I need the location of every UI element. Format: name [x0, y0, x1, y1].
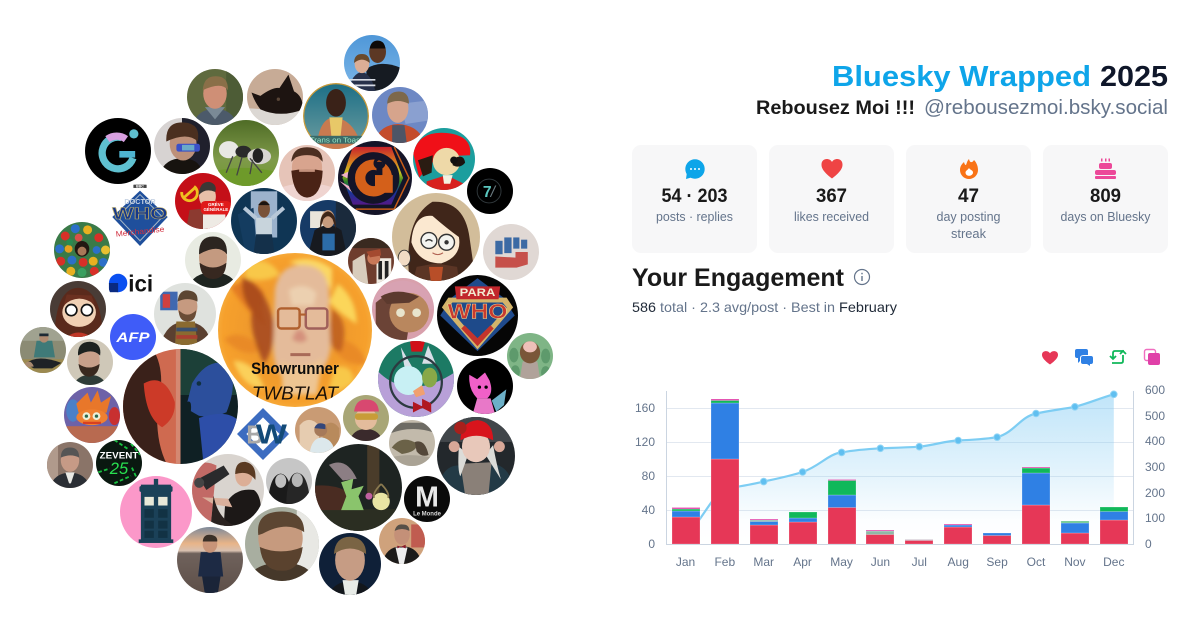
right axis labels: 100: [1145, 511, 1165, 525]
icon: heart: [822, 159, 842, 178]
month labels: Feb: [714, 555, 735, 569]
avatar: poster with gold border: [303, 83, 369, 149]
right axis labels: 300: [1145, 460, 1165, 474]
month labels: [676, 555, 1124, 569]
avatar: man in Tardis doorway: [231, 188, 297, 254]
avatar: green cartoon creature: [507, 333, 553, 379]
stacked bars: [672, 399, 1128, 544]
bar: Feb: [711, 399, 739, 544]
stat card: days on Bluesky: 809: [1090, 186, 1121, 207]
bar: Mar: [750, 519, 778, 544]
axes: [666, 391, 1134, 544]
left axis labels: 80: [642, 469, 655, 483]
avatar: Para Who logo: PARA: [460, 287, 495, 299]
month labels: Apr: [793, 555, 812, 569]
avatar: kid in pink cap: [343, 395, 389, 441]
month labels: Oct: [1027, 555, 1046, 569]
stat card: streak: streak: [951, 227, 987, 241]
avatar: man sitting in park: [20, 327, 66, 373]
avatar: Doctor Who merchandise logo: WHO: [112, 205, 168, 223]
avatar: pink cat girl on black: [457, 358, 513, 414]
stat card: streak: [906, 145, 1031, 253]
icon: quote legend: [1144, 350, 1160, 365]
stat card: posts and replies: 54 · 203: [662, 186, 728, 207]
engagement summary: February: [839, 299, 897, 315]
avatar: stained glass bird: [378, 341, 454, 417]
icon: cake: [1095, 158, 1116, 179]
avatar: BW logo: B: [246, 419, 263, 449]
avatar: man in striped scarf: [154, 283, 216, 345]
avatar: man with dark hair and beard: [67, 339, 113, 385]
avatar: man in red jacket: [372, 87, 428, 143]
avatar: black cat: [247, 69, 303, 125]
right axis labels: 400: [1145, 434, 1165, 448]
bar: Nov: [1061, 521, 1089, 544]
left axis labels: 160: [635, 401, 655, 415]
right axis labels: 600: [1145, 383, 1165, 397]
avatar: man under arches: [295, 407, 341, 453]
month labels: May: [830, 555, 853, 569]
avatar: Le Monde logo: M: [415, 481, 439, 513]
avatar: red and blue split portrait: [123, 349, 238, 464]
cumulative line: [686, 394, 1114, 533]
left axis labels: 0: [648, 537, 655, 551]
left axis labels: 40: [642, 503, 655, 517]
avatar: man with led visor: [154, 118, 210, 174]
avatar: fist logo: [483, 224, 539, 280]
icon: flame: [960, 159, 978, 179]
avatar: Zevent 25: [96, 440, 142, 486]
bar: Apr: [789, 512, 817, 544]
stat card: days on Bluesky: [1043, 145, 1168, 253]
user name and handle: [756, 97, 1168, 119]
avatar: large showrunner flame portrait: [218, 253, 372, 407]
avatar: 7 logo: /: [490, 184, 497, 201]
avatar: panda ant: [213, 120, 279, 186]
avatar: Doctor Who merchandise logo: DOCTOR: [124, 197, 156, 206]
legend icons: [1042, 349, 1160, 366]
avatar: cartoon girl with long hair: [392, 193, 480, 281]
avatar: green goblin with lantern: [315, 444, 402, 531]
avatar: poster with gold border: Trans on Toast: [310, 135, 362, 144]
bar: Dec: [1100, 507, 1128, 544]
avatar: BW logo: [237, 408, 289, 460]
user name and handle: @rebousezmoi.bsky.social: [924, 97, 1168, 119]
avatar: small illustrated character: [348, 238, 394, 284]
stat card: streak: 47: [958, 186, 979, 207]
icon: info: [854, 270, 870, 284]
title: 2025: [1100, 61, 1168, 93]
bar: Jun: [866, 530, 894, 544]
title: Bluesky Wrapped: [832, 61, 1091, 93]
right axis labels: [1145, 383, 1165, 551]
month labels: Nov: [1064, 555, 1086, 569]
avatar: two people: [344, 35, 400, 91]
user name and handle: Rebousez Moi !!!: [756, 97, 915, 119]
avatar: red hammer and sickle: GÉNÉRALE: [203, 205, 228, 212]
cumulative area: [686, 394, 1114, 544]
right axis labels: 200: [1145, 486, 1165, 500]
engagement summary: 586: [632, 299, 656, 315]
stat card: likes: [769, 145, 894, 253]
cumulative points: [760, 391, 1117, 485]
avatar: BW logo: W: [256, 418, 288, 449]
avatar: ball pit: [54, 222, 110, 278]
avatar: Le Monde logo: [404, 476, 450, 522]
avatar: ici logo: [108, 271, 153, 297]
bar: Oct: [1022, 467, 1050, 544]
avatar: 7 logo: [467, 168, 513, 214]
avatar: bearded man close-up: [245, 507, 319, 581]
avatar: man on beach at sunset: [177, 527, 243, 593]
icon: reply legend: [1075, 349, 1093, 366]
avatar: Doctor Who merchandise logo: [112, 184, 168, 246]
stat card: posts and replies: [632, 145, 757, 253]
month labels: Jan: [676, 555, 695, 569]
avatar: red hammer and sickle: GRÈVE: [208, 200, 224, 207]
avatar: large showrunner flame portrait: TWBTLAT: [252, 382, 340, 403]
month labels: Jul: [912, 555, 927, 569]
avatar: black and white women: [266, 458, 312, 504]
month labels: Jun: [871, 555, 890, 569]
stat card: likes: likes received: [794, 210, 869, 224]
avatar: C logo: [85, 118, 151, 184]
right axis labels: 0: [1145, 537, 1152, 551]
avatar: Inside Out anxiety: [64, 387, 120, 443]
avatar: Doctor Who merchandise logo: BBC: [136, 184, 145, 188]
avatar: cartoon woman with glasses: [50, 281, 106, 337]
bar: Jul: [905, 540, 933, 544]
stat card: streak: day posting: [936, 210, 1001, 224]
avatar cluster: [20, 35, 553, 595]
avatar: rainbow G hexagon: [338, 141, 412, 215]
avatar: blond man: [187, 69, 243, 125]
right axis labels: 500: [1145, 409, 1165, 423]
bar: Sep: [983, 533, 1011, 544]
avatar: Le Monde logo: Le Monde: [413, 512, 442, 518]
avatar: man in bow tie: [379, 518, 425, 564]
month labels: Sep: [986, 555, 1008, 569]
month labels: Dec: [1103, 555, 1124, 569]
avatar: Para Who logo: [437, 275, 518, 356]
avatar: blond man on navy: [319, 533, 381, 595]
avatar: cartoon pink hat: [372, 278, 434, 340]
icon: like legend: [1042, 351, 1058, 364]
engagement summary: [632, 299, 897, 315]
icon: speech bubble: [685, 159, 705, 179]
avatar: man in suit: [47, 442, 93, 488]
icon: repost legend: [1110, 351, 1126, 363]
avatar: ici logo: ici: [128, 271, 153, 297]
stat card: likes: 367: [816, 186, 847, 207]
avatar: bearded man: [185, 232, 241, 288]
chart: monthly engagement: [635, 383, 1165, 569]
heading: your engagement: Your Engagement: [632, 264, 845, 292]
avatar: man with large beard: [279, 145, 335, 201]
avatar: Zevent 25: 25: [109, 459, 129, 478]
avatar: Doctor Who merchandise logo: Merchandise: [115, 225, 165, 239]
avatar: Para Who logo: WHO: [448, 301, 507, 324]
avatar: Zevent 25: ZEVENT: [100, 450, 139, 460]
left axis labels: 120: [635, 435, 655, 449]
avatar: AFP logo: AFP: [115, 330, 150, 345]
engagement summary: total · 2.3 avg/post · Best in: [660, 299, 835, 315]
bar: Jan: [672, 508, 700, 544]
avatar: woman with film camera: [192, 454, 264, 526]
grid lines: [666, 408, 1134, 510]
left axis labels: [635, 401, 655, 551]
avatar: AFP logo: [110, 314, 156, 360]
bar: Aug: [944, 524, 972, 544]
avatar: woman by Tardis: [300, 200, 356, 256]
stat card: posts and replies: posts · replies: [656, 210, 733, 224]
avatar: cartoon dog in red hat: [413, 128, 475, 190]
avatar: 7 logo: 7: [483, 184, 492, 201]
month labels: Mar: [753, 555, 774, 569]
stat card: days on Bluesky: days on Bluesky: [1060, 210, 1151, 224]
bar: May: [828, 480, 856, 544]
avatar: woman in red beanie: [437, 417, 515, 495]
avatar: rocks: [389, 420, 435, 466]
avatar: large showrunner flame portrait: Showrunner: [251, 360, 340, 378]
avatar: red hammer and sickle: [175, 173, 231, 229]
month labels: Aug: [948, 555, 969, 569]
avatar: Tardis on pink: [120, 476, 192, 548]
